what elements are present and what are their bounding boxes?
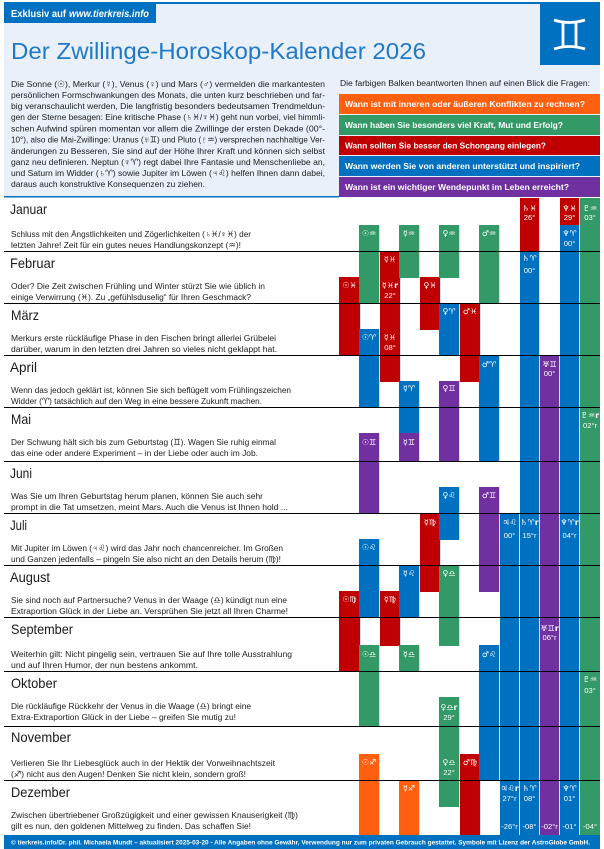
month: Januar: Schluss mit den Ängstlichkeiten und Zögerlichkeiten (♄♓/♆♓) der	[11, 229, 251, 239]
column 8 bars: ♂♊	[482, 491, 496, 500]
month: April: Wenn das jedoch geklärt ist, können Sie sich beflügelt vom Frühlingszeichen	[11, 385, 291, 395]
column 4 bars: ☿♊	[403, 438, 415, 447]
legend: question bars: Wann sollten Sie besser den Schongang einlegen?	[345, 140, 546, 150]
month: Oktober: Die rückläufige Rückkehr der Venus in die Waage (♎) bringt eine	[11, 701, 251, 711]
column 1 bars: ☉♓	[342, 281, 357, 290]
footer: © tierkreis.info/Dr. phil. Michaela Mundt – aktualisiert 2025-03-20 - Alle Angaben ohne Gewähr, Verwendung nur zum privaten Gebrauch gestattet. Symbole mit Lizenz der AstroGlobe GmbH.	[11, 838, 590, 846]
month: Februar: Oder? Die Zeit zwischen Frühling und Winter stürzt Sie wie üblich in	[11, 281, 265, 291]
month: Juli	[10, 518, 283, 564]
footer	[4, 835, 600, 849]
column 9 bars	[500, 513, 519, 835]
badge: Exklusiv auf	[4, 4, 156, 23]
column 13 bars: -04°	[583, 822, 597, 831]
column 3 bars: ☿♍	[384, 595, 396, 604]
legend: question bars: Wann ist mit inneren oder äußeren Konflikten zu rechnen?	[345, 99, 585, 109]
column 10 bars: -08°	[522, 822, 537, 831]
column 6 bars: ♀♈	[442, 307, 456, 316]
column 9 bars: ♃♌	[502, 518, 517, 527]
column 5 bars	[420, 277, 440, 592]
text block: introduction: Die Sonne (☉), Merkur (☿), Venus (♀) und Mars (♂) vermelden die markantesten	[11, 79, 325, 89]
column 8 bars: ♂♒	[482, 229, 496, 238]
column 9 bars: -26°r	[501, 822, 518, 831]
month: Oktober: Oktober	[11, 676, 57, 691]
column 10 bars: ♄♈	[522, 784, 537, 793]
badge: Exklusiv auf: Exklusiv auf	[11, 9, 67, 20]
column 12 bars: ♆♈	[562, 229, 577, 238]
column 12 bars: 00°	[564, 239, 575, 248]
column 2 bars	[359, 225, 379, 835]
column 13 bars: ♇♒	[583, 204, 597, 213]
column 3 bars: ☿♓	[384, 255, 396, 264]
column 4 bars: ☿♈	[403, 384, 415, 393]
legend: question bars: Wann haben Sie besonders viel Kraft, Mut und Erfolg?	[345, 120, 563, 130]
month: August: August	[10, 570, 50, 585]
column 2 bars: ☉♊	[362, 438, 376, 447]
text block: introduction: big veranschaulicht werden, Die langfristig besonders bedeutsamen Trendmeldun-	[11, 101, 325, 111]
month: Oktober	[11, 676, 251, 722]
column 12 bars: -01°	[562, 822, 577, 831]
text block: introduction: persönlichen Formschwankungen des Monats, die unten kurz beschrieben und far-	[11, 90, 325, 100]
legend: question bars	[339, 94, 600, 197]
month: Juli: Juli	[10, 518, 27, 533]
month: Mai: das eine oder andere Experiment – in der Liebe oder auch im Job.	[11, 448, 258, 458]
month: Januar: Januar	[10, 202, 47, 217]
month: März: März	[11, 308, 39, 323]
month: Mai	[11, 412, 276, 458]
column 6 bars	[439, 225, 459, 807]
icon: gemini sign	[540, 3, 600, 65]
column 3 bars	[380, 252, 400, 646]
column 4 bars	[399, 225, 419, 835]
month: Mai: Mai	[11, 412, 31, 427]
text block: introduction: schen Aufwind spüren momentan vor allem die Zwillinge der ersten Dekade (00°-	[11, 124, 325, 134]
column 12 bars: 01°	[564, 794, 575, 803]
month: Februar: einige Verwirrung (♓). Zu „gefühlsduselig“ für Ihren Geschmack?	[11, 292, 251, 302]
month: Februar: Februar	[10, 256, 55, 271]
month: Oktober: Extra-Extraportion Glück in der Liebe – greifen Sie mutig zu!	[11, 712, 236, 722]
column 10 bars: 00°	[524, 266, 535, 275]
column 9 bars: 00°	[504, 531, 515, 540]
column 7 bars	[460, 303, 480, 835]
column 8 bars: ♂♈	[482, 360, 496, 369]
column 8 bars	[479, 225, 499, 780]
month: März: darüber, warum in den letzten drei Jahren so vieles nicht geklappt hat.	[11, 344, 277, 354]
column 6 bars: 29°	[443, 713, 455, 722]
column 6 bars: ♀♊	[442, 384, 456, 393]
badge: Exklusiv auf: www.tierkreis.info	[69, 9, 149, 20]
column 11 bars: ♅♊r	[540, 624, 559, 633]
month: Januar: letzten Jahre! Zeit für ein gutes neues Handlungskonzept (♒)!	[11, 240, 241, 250]
column 10 bars: ♄♈r	[520, 518, 539, 527]
column 7 bars: ♂♓	[463, 307, 477, 316]
column 11 bars: ♅♊	[542, 360, 557, 369]
column 5 bars: ☿♍	[424, 518, 436, 527]
column 3 bars: 22°	[384, 291, 396, 300]
column 3 bars: 08°	[384, 343, 396, 352]
column 11 bars	[540, 355, 559, 835]
month: Dezember: gilt es nun, den goldenen Mittelweg zu finden. Das schaffen Sie!	[11, 821, 251, 831]
column 13 bars: 03°	[584, 213, 596, 222]
column 6 bars: ♀♎r	[441, 703, 458, 712]
text block: introduction: und Saturn im Widder (♄♈) sowie Jupiter im Löwen (♃♌) helfen Ihnen dann dabei,	[11, 168, 325, 178]
column 12 bars: ♆♓	[562, 204, 577, 213]
column 13 bars	[580, 198, 600, 835]
column 13 bars: 02°r	[583, 421, 597, 430]
column 10 bars: 08°	[524, 794, 535, 803]
column 6 bars: ♀♎	[442, 758, 456, 767]
column 12 bars	[560, 198, 579, 835]
month: April: Widder (♈) tatsächlich auf den Weg in eine bessere Zukunft machen.	[11, 396, 262, 406]
month: Februar	[10, 256, 265, 302]
column 3 bars: ☿♓r	[382, 281, 398, 290]
column 6 bars: 22°	[443, 768, 455, 777]
column 4 bars: ☿♐	[403, 784, 415, 793]
month: März	[11, 308, 277, 354]
column 12 bars: 29°	[564, 213, 575, 222]
column 12 bars: 04°r	[562, 531, 577, 540]
month: Juli: und Ganzen jedenfalls – pingeln Sie also nicht an den Details herum (♍)!	[11, 554, 281, 564]
month: Juni: Was Sie um Ihren Geburtstag herum planen, können Sie auch sehr	[11, 491, 263, 501]
column 6 bars: ♀♎	[442, 569, 456, 578]
month: November: November	[11, 730, 71, 745]
column 3 bars: ☿♓	[384, 333, 396, 342]
column 13 bars: 03°	[584, 686, 596, 695]
month: April	[10, 360, 291, 406]
month: Mai: Der Schwung hält sich bis zum Geburtstag (♊). Wagen Sie ruhig einmal	[11, 437, 276, 447]
month: September: Weiterhin gilt: Nicht pingelig sein, vertrauen Sie auf Ihre tolle Ausstrahlung	[11, 649, 292, 659]
column 10 bars	[520, 198, 539, 835]
chart: calendar bars	[339, 198, 600, 835]
month: Juni: Juni	[10, 466, 32, 481]
column 9 bars: 27°r	[502, 794, 517, 803]
column 8 bars: ♂♌	[482, 650, 496, 659]
month: Dezember	[11, 785, 298, 831]
month: April: April	[10, 360, 37, 375]
column 10 bars: ♄♓	[522, 204, 537, 213]
column 12 bars: ♆♈r	[560, 518, 579, 527]
month: November: Verlieren Sie Ihr Liebesglück auch in der Hektik der Vorweihnachtszeit	[11, 758, 276, 768]
month: September: September	[11, 622, 73, 637]
text block: introduction: 10°), also die Mai-Zwillinge: Uranus (♅♊) und Pluto (♇♒) versprechen nachhaltige Ver-	[11, 134, 325, 144]
title: Der Zwillinge-Horoskop-Kalender 2026	[11, 38, 426, 64]
month: Dezember: Dezember	[11, 785, 70, 800]
month: November	[11, 730, 276, 779]
month: Juni	[10, 466, 288, 512]
column 4 bars: ☿♌	[403, 569, 415, 578]
column 11 bars: -02°r	[541, 822, 558, 831]
column 2 bars: ☉♈	[362, 333, 376, 342]
legend: question bars: Wann werden Sie von anderen unterstützt und inspiriert?	[345, 161, 580, 171]
column 2 bars: ☉♎	[362, 650, 376, 659]
column 4 bars: ☿♒	[403, 229, 415, 238]
panel: header	[4, 2, 600, 198]
column 5 bars: ♀♓	[423, 281, 437, 290]
column 11 bars: 00°	[544, 369, 555, 378]
text block: introduction: ganz neu definieren. Neptun (♆♈) regt dabei Ihre Fantasie und Menschenliebe an,	[11, 157, 325, 167]
column 7 bars: ♂♍	[463, 758, 477, 767]
text block: introduction	[11, 79, 326, 189]
text block: introduction: daraus auch konstruktive Konsequenzen zu ziehen.	[11, 179, 205, 189]
month: Januar	[10, 202, 251, 250]
month: August: Extraportion Glück in der Liebe an. Versprühen Sie jetzt all Ihren Charme!	[11, 606, 288, 616]
column 13 bars: ♇♒r	[581, 411, 599, 420]
column 4 bars: ☿♎	[403, 650, 415, 659]
month: Juni: prompt in die Tat umsetzen, meint Mars. Auch die Venus ist Ihnen hold ...	[11, 502, 288, 512]
column 2 bars: ☉♐	[362, 758, 376, 767]
month: Dezember: Zwischen übertriebener Großzügigkeit und einer gewissen Knauserigkeit (♍)	[11, 810, 298, 820]
column 1 bars: ☉♍	[342, 595, 357, 604]
month: März: Merkurs erste rückläufige Phase in den Fischen bringt allerlei Grübelei	[11, 333, 276, 343]
text block: introduction: gen der Sterne besagen: Eine kritische Phase (♄♓/♆♓) geht nun vorbei, viel himmli-	[11, 112, 325, 122]
column 12 bars: ♆♈	[562, 784, 577, 793]
legend intro text: Die farbigen Balken beantworten Ihnen auf einen Blick die Fragen:	[340, 78, 590, 88]
column 2 bars: ☉♒	[362, 229, 376, 238]
month: September	[11, 622, 292, 670]
column 1 bars	[339, 277, 360, 671]
text block: introduction: änderungen zu Besseren, Sie sind auf der Höhe Ihrer Kraft und können sich selbst	[11, 146, 326, 156]
column 10 bars: ♄♈	[522, 254, 537, 263]
column 13 bars: ♇♒	[583, 675, 597, 684]
column 6 bars: ♀♒	[442, 229, 456, 238]
column 9 bars: ♃♌r	[500, 784, 519, 793]
column 10 bars: 26°	[524, 213, 535, 222]
column 6 bars: ♀♌	[442, 491, 456, 500]
month: August: Sie sind noch auf Partnersuche? Venus in der Waage (♎) kündigt nun eine	[11, 595, 287, 605]
column 11 bars: 06°r	[542, 633, 557, 642]
column 2 bars: ☉♌	[362, 543, 376, 552]
month: September: und auf Ihren Humor, der nun bestens ankommt.	[11, 660, 198, 670]
legend: question bars: Wann ist ein wichtiger Wendepunkt im Leben erreicht?	[345, 182, 569, 192]
month: Juli: Mit Jupiter im Löwen (♃♌) wird das Jahr noch chancenreicher. Im Großen	[11, 543, 283, 553]
column 10 bars: 15°r	[522, 531, 537, 540]
month: November: (♐) nicht aus den Augen! Denken Sie nicht klein, sondern groß!	[11, 769, 246, 779]
month: August	[10, 570, 288, 616]
